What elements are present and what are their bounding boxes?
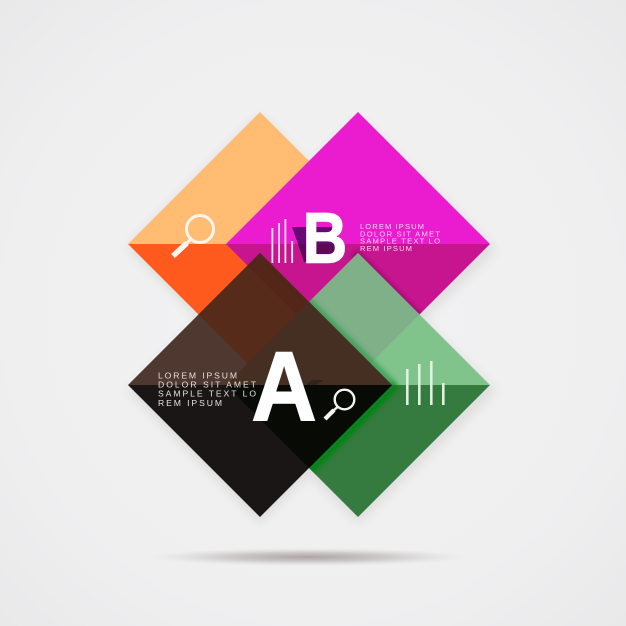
icon: magnifier <box>325 390 354 419</box>
dark over orange overlap <box>198 253 309 364</box>
letter shadow lower <box>298 244 338 262</box>
dark over green top overlap <box>226 302 392 385</box>
icon: bar chart <box>406 361 445 405</box>
panel soft shadows <box>128 116 496 523</box>
text block: pink panel: REM IPSUM <box>360 244 412 253</box>
panel: green diamond <box>309 253 490 517</box>
panel: pink diamond <box>226 112 490 376</box>
panel: orange diamond <box>128 112 392 376</box>
text block: dark panel: REM IPSUM <box>158 398 222 408</box>
floor shadow <box>148 548 468 566</box>
pink shadow on edge near green <box>354 253 426 325</box>
text block: dark panel: LOREM IPSUM <box>158 370 237 380</box>
text block: pink panel: DOLOR SIT AMET <box>360 229 440 238</box>
text block: pink panel: SAMPLE TEXT LO <box>360 237 440 246</box>
dark over pink overlap <box>322 314 370 364</box>
icon: bar chart <box>272 219 293 263</box>
icon: magnifier <box>173 216 214 256</box>
text block: dark panel: DOLOR SIT AMET <box>158 380 257 390</box>
panel: dark diamond <box>128 253 392 517</box>
text block: pink panel: LOREM IPSUM <box>360 222 424 231</box>
letter shadow <box>306 380 324 385</box>
text block: pink panel <box>360 222 440 253</box>
green over pink overlap <box>309 253 420 362</box>
text block: dark panel: SAMPLE TEXT LO <box>158 389 256 399</box>
text block: dark panel <box>158 370 257 408</box>
letter A: A <box>252 332 317 441</box>
letter shadow <box>292 227 338 244</box>
green glow along upper dark edge <box>309 298 398 385</box>
dark over green bottom overlap <box>226 385 392 468</box>
letter B: B <box>303 199 347 278</box>
green glow along lower dark edge <box>300 385 396 481</box>
dark over orange and pink overlap <box>248 253 309 314</box>
